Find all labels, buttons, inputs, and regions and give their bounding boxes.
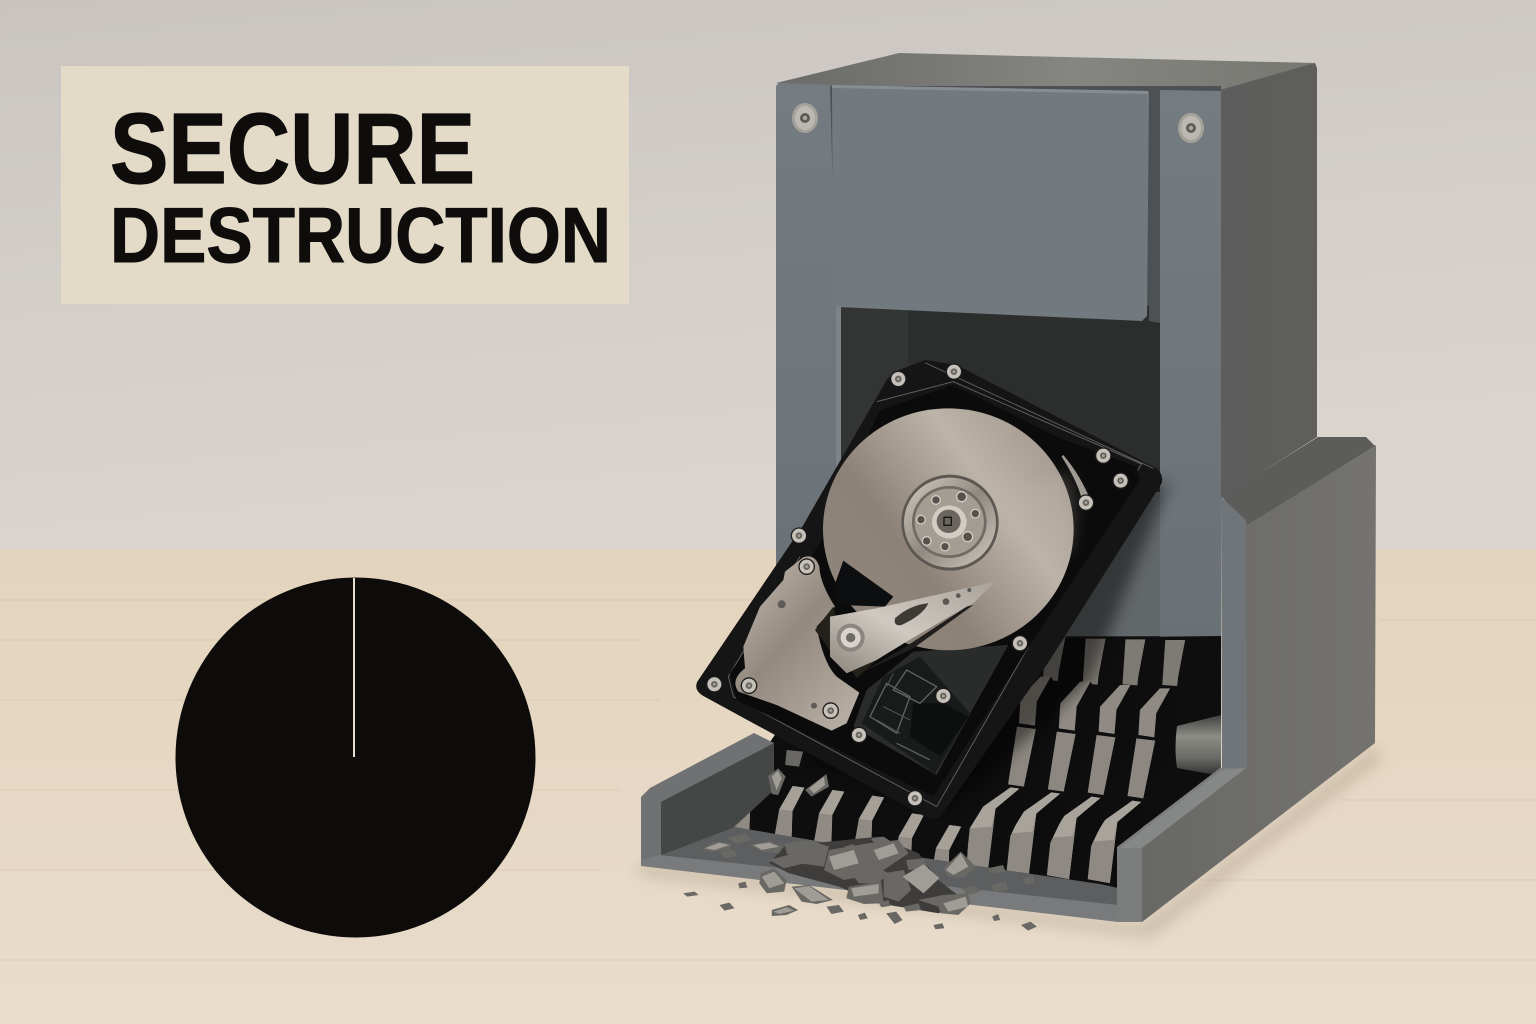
housing screw: right bbox=[1178, 113, 1204, 143]
tray right wall bbox=[1117, 768, 1246, 922]
voice coil magnet bbox=[832, 561, 893, 607]
plate holes bbox=[778, 600, 817, 709]
lower cavity floor bbox=[853, 645, 1008, 775]
shredder shadow on desk bbox=[640, 745, 1382, 938]
shredder blades bbox=[732, 635, 1185, 883]
disk platter bbox=[823, 408, 1074, 650]
tray floor bbox=[641, 827, 1118, 922]
front panel bbox=[832, 85, 1149, 321]
drive cavity bbox=[730, 385, 1140, 797]
tray left wall bbox=[641, 733, 774, 860]
title line: destruction: DESTRUCTION bbox=[110, 191, 611, 279]
circuit board bbox=[862, 657, 970, 773]
pie chart bbox=[176, 578, 536, 938]
background wall bbox=[0, 0, 1536, 550]
shredder interior bbox=[660, 636, 1221, 905]
hard drive shadow bbox=[800, 480, 1170, 810]
lower housing bbox=[1142, 437, 1376, 922]
wooden desk surface bbox=[0, 549, 1536, 1024]
hard disk drive bbox=[696, 360, 1162, 819]
top magnet plate bbox=[735, 556, 859, 731]
shredder machine bbox=[641, 53, 1376, 931]
roller axle bbox=[1176, 715, 1221, 776]
title line: secure: SECURE bbox=[110, 93, 475, 205]
title panel bbox=[61, 66, 629, 304]
drive chassis bbox=[696, 360, 1162, 819]
actuator arm bbox=[815, 582, 995, 678]
housing screw: left bbox=[792, 103, 818, 133]
upper housing bbox=[776, 53, 1317, 640]
drive screws bbox=[706, 363, 1129, 807]
spindle hub bbox=[901, 475, 999, 571]
metal debris bbox=[683, 750, 1037, 931]
right inner ring bbox=[1062, 455, 1092, 503]
